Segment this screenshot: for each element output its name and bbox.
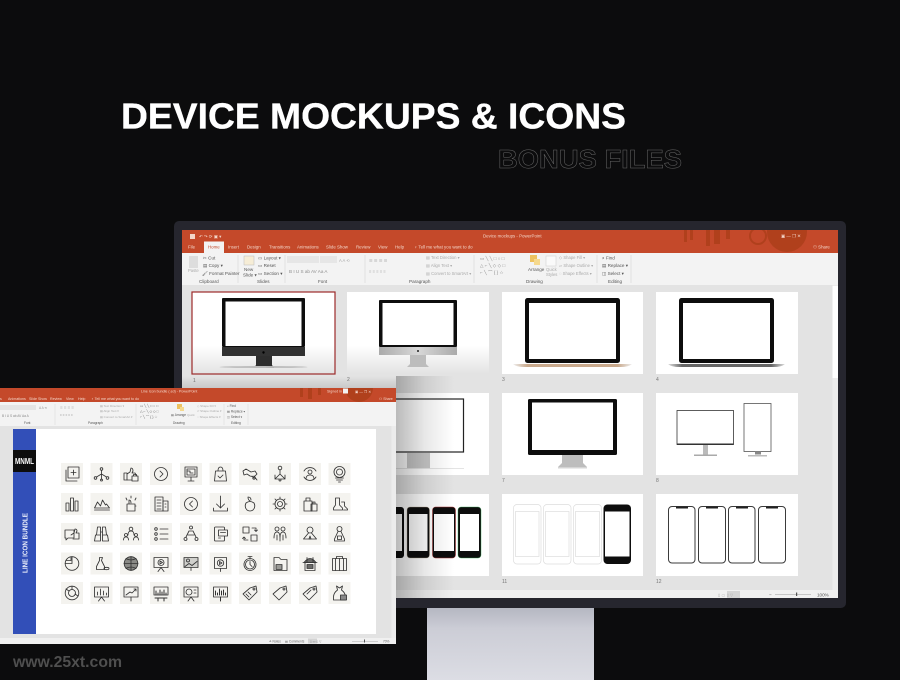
icon: image on board xyxy=(180,552,202,574)
icon: person with lock xyxy=(328,523,350,545)
front PowerPoint window xyxy=(0,374,396,644)
window title bar: Signed in xyxy=(327,390,342,394)
slide thumbnail 1: dark desktop xyxy=(192,292,335,384)
slide thumbnail 8: landscape and portrait displays: 8 xyxy=(656,478,659,484)
slide thumbnail 10: coloured phones, partly hidden xyxy=(347,494,489,576)
icon: pie chart xyxy=(61,552,83,574)
PowerPoint screen background xyxy=(182,230,838,598)
window status bar: 70% xyxy=(383,640,390,644)
icon: branching person xyxy=(269,463,291,485)
scrollbar xyxy=(832,285,838,590)
ribbon: B I U S ab AV Aa A xyxy=(289,269,328,274)
window ribbon: Font xyxy=(24,421,30,425)
window title bar: ♀ Tell me what you want to do xyxy=(91,397,139,401)
ribbon: Slide ▾ xyxy=(243,272,257,278)
icon: bullet list xyxy=(150,523,172,545)
vertical label: LINE ICON BUNDLE xyxy=(22,513,30,573)
icon: folder xyxy=(269,552,291,574)
window title bar: Slide Show xyxy=(29,397,47,401)
subtitle: outlined bonus files: BONUS FILES xyxy=(498,144,682,174)
title bar: ⚇ Share xyxy=(813,244,830,250)
ribbon: Paste xyxy=(188,268,199,273)
window title bar: Help xyxy=(78,397,85,401)
window ribbon: B I U S ab AV Aa A xyxy=(2,414,30,418)
icon: network nodes xyxy=(90,463,112,485)
title bar: ▣ — ❐ ✕ xyxy=(781,234,801,238)
window ribbon: A A ⟲ xyxy=(39,406,47,410)
icon: gear with thumb xyxy=(269,493,291,515)
slide thumbnail 3: gold laptop xyxy=(502,292,643,383)
title: DEVICE MOCKUPS & ICONS xyxy=(121,96,626,136)
ribbon: ▤ Convert to SmartArt ▾ xyxy=(426,271,471,276)
ribbon: ◫ Select ▾ xyxy=(602,271,625,276)
title bar: Home xyxy=(208,244,220,250)
watermark: www.25xt.com xyxy=(12,654,122,671)
icon: shop xyxy=(299,552,321,574)
icon: bars on screen xyxy=(210,582,232,604)
window title bar: ⚇ Share xyxy=(379,397,393,401)
window ribbon: ▤ Text Direction ▾ xyxy=(100,404,125,408)
status bar: 100% xyxy=(817,592,829,598)
window ribbon: Quick xyxy=(187,413,195,417)
window title bar: View xyxy=(66,397,74,401)
icon: stopwatch xyxy=(239,552,261,574)
slide thumbnail 7: black display: 7 xyxy=(502,478,505,484)
icon: play on board xyxy=(150,552,172,574)
status bar: ▯ ▭ ▯ ▽ xyxy=(718,592,734,598)
window status bar xyxy=(0,638,396,644)
monitor with PowerPoint window xyxy=(174,212,846,608)
icon: bar chart xyxy=(61,493,83,515)
icon: shopping bag with check xyxy=(210,463,232,485)
ribbon xyxy=(182,253,838,285)
ribbon: ▤ Replace ▾ xyxy=(602,263,629,268)
window ribbon: Editing xyxy=(231,421,241,425)
slide thumbnail 2: silver desktop: 2 xyxy=(347,377,350,383)
window title bar: Animations xyxy=(8,397,26,401)
ribbon: Editing xyxy=(608,279,622,284)
icon: bars on board xyxy=(150,582,172,604)
slide thumbnail 1: dark desktop: 1 xyxy=(193,378,196,384)
window ribbon: ◌ Shape Effects ▾ xyxy=(197,415,221,419)
title bar: Insert xyxy=(228,244,240,250)
ribbon: Quick xyxy=(546,267,558,272)
shadow cast by the front window xyxy=(182,376,454,598)
ribbon: ▭ Layout ▾ xyxy=(258,256,282,260)
slide thumbnail 11: white and black phones xyxy=(502,494,643,585)
ribbon: ≡ ≡ ≡ ≡ ≡ xyxy=(369,269,386,274)
ribbon: ▭ Section ▾ xyxy=(258,271,283,276)
blue sidebar xyxy=(13,429,36,634)
ribbon: A A ⟲ xyxy=(339,258,350,263)
ribbon: ▤ Text Direction ▾ xyxy=(426,255,460,260)
window ribbon: Drawing xyxy=(173,421,185,425)
icon: binoculars xyxy=(90,523,112,545)
window ribbon: ▱ Shape Outline ▾ xyxy=(197,409,222,413)
slide thumbnail 7: black display xyxy=(502,393,643,484)
icon: doughnut chart xyxy=(61,582,83,604)
slide thumbnail 12: notch phones xyxy=(656,494,798,585)
ribbon: Arrange xyxy=(528,267,545,272)
icon: swapping squares xyxy=(239,523,261,545)
icon: download xyxy=(210,493,232,515)
icon: people in cycle xyxy=(299,463,321,485)
window title bar: Review xyxy=(50,397,62,401)
ribbon: ▱ Shape Outline ▾ xyxy=(559,263,593,268)
icon: presentation monitor xyxy=(180,463,202,485)
icon: boots xyxy=(328,493,350,515)
slide thumbnail 12: notch phones: 12 xyxy=(656,579,662,585)
status bar xyxy=(182,590,838,598)
window ribbon: △ ⌐ ╲ ◇ ◇ □ xyxy=(140,410,159,414)
title bar xyxy=(182,230,838,253)
ribbon: Font xyxy=(318,279,328,284)
icon: price tag 3 xyxy=(299,582,321,604)
ribbon: ◇ Shape Fill ▾ xyxy=(559,255,585,260)
icon: hand with rays xyxy=(120,493,142,515)
logo: MNML: MNML xyxy=(15,457,34,466)
icon: arrow left in circle xyxy=(180,493,202,515)
ribbon: Paragraph xyxy=(409,279,431,284)
white slide xyxy=(13,429,376,634)
icon: apple hand xyxy=(239,493,261,515)
slide thumbnail 4: space grey laptop: 4 xyxy=(656,377,659,383)
ribbon: Styles xyxy=(546,272,557,277)
title bar: Device mockups - PowerPoint xyxy=(483,234,542,238)
ribbon: ⌐ ╲ ⌒ { } ☆ xyxy=(480,269,504,276)
monitor bezel xyxy=(174,221,846,608)
slide thumbnail 8: landscape and portrait displays xyxy=(656,393,798,484)
slide thumbnail 6: slim display, partly hidden xyxy=(347,393,489,475)
ribbon: ◌ Shape Effects ▾ xyxy=(559,271,592,276)
icon: suitcase xyxy=(328,552,350,574)
window ribbon: ☰ ☰ ☰ ☰ xyxy=(60,406,74,410)
window background xyxy=(0,388,396,644)
ribbon: 🖌 Format Painter xyxy=(202,270,240,276)
ribbon: New xyxy=(244,267,254,272)
icon: arrow right in circle xyxy=(150,463,172,485)
icon: chart on easel xyxy=(90,582,112,604)
title bar: ♀ Tell me what you want to do xyxy=(414,244,473,250)
window ribbon: ⌕ Find xyxy=(227,404,236,408)
icon: thumbs up speech bubble xyxy=(61,523,83,545)
ribbon: ▭ Reset xyxy=(258,263,276,268)
ribbon: △ ⌐ ╲ ◇ ◇ □ xyxy=(480,262,505,269)
window ribbon: ◇ Shape Fill ▾ xyxy=(197,404,216,408)
monitor stand xyxy=(427,607,594,680)
window ribbon: Paragraph xyxy=(88,421,103,425)
window ribbon: ▤ Arrange xyxy=(171,413,186,417)
ribbon: ▤ Align Text ▾ xyxy=(426,263,452,268)
icon: money bag and coins xyxy=(90,552,112,574)
title bar: Design xyxy=(247,244,261,250)
ribbon: ⌕ Find xyxy=(602,256,615,260)
window title bar: ▣ — ❐ ✕ xyxy=(355,389,371,394)
icon: handshake xyxy=(239,463,261,485)
window title bar: s xyxy=(0,397,2,401)
window status bar: ▤ Comments xyxy=(285,640,305,644)
slide thumbnail 2: silver desktop xyxy=(347,292,489,383)
icon: hierarchy triangle xyxy=(180,523,202,545)
icon: phone with chat xyxy=(210,523,232,545)
window ribbon: ◫ Select ▾ xyxy=(227,415,243,419)
window ribbon: ≡ ≡ ≡ ≡ ≡ xyxy=(60,413,73,417)
status bar: − xyxy=(769,592,772,598)
ribbon: ✂ Cut xyxy=(203,256,216,260)
icon: play on screen xyxy=(210,552,232,574)
ribbon: Slides xyxy=(257,279,270,284)
ribbon: Drawing xyxy=(526,279,543,284)
window ribbon: ▭ ╲ ╲ □ ○ □ xyxy=(140,404,158,408)
window title bar xyxy=(0,388,396,402)
icon: person xyxy=(299,523,321,545)
ribbon: ▭ ╲ ╲ □ ○ □ xyxy=(480,255,505,262)
icon: bags xyxy=(299,493,321,515)
icon: bulb badge xyxy=(328,463,350,485)
window scrollbar xyxy=(392,426,396,638)
logo: MNML xyxy=(13,450,36,472)
icon: money bag with coins xyxy=(328,582,350,604)
title bar: File xyxy=(188,244,196,250)
icon: growth on easel xyxy=(120,582,142,604)
window ribbon: ⌐ ╲ ⌒ { } ☆ xyxy=(140,414,157,419)
ribbon: Clipboard xyxy=(199,279,219,284)
title bar: Animations xyxy=(297,244,320,250)
title bar: Help xyxy=(395,244,405,250)
slide thumbnail 11: white and black phones: 11 xyxy=(502,579,507,585)
icon: two people xyxy=(269,523,291,545)
window title bar: Line Icon bundle (.ed) - PowerPoint xyxy=(141,390,197,394)
window ribbon xyxy=(0,402,396,426)
title bar: ↶ ↷ ⟳ ▣ ▾ xyxy=(199,234,221,239)
icon: thumbs up with lock xyxy=(120,463,142,485)
window ribbon: ▤ Align Text ▾ xyxy=(100,409,119,413)
icon: group of people xyxy=(90,493,112,515)
window ribbon: ▤ Convert to SmartArt ▾ xyxy=(100,415,133,419)
icon: team hierarchy xyxy=(120,523,142,545)
title bar: View xyxy=(378,244,388,250)
window ribbon: ▤ Replace ▾ xyxy=(227,410,245,414)
slide thumbnail 4: space grey laptop xyxy=(656,292,798,383)
ribbon: ☰ ☰ ☰ ☰ xyxy=(369,258,388,263)
icon: pie on easel xyxy=(180,582,202,604)
icon: shaded globe xyxy=(120,552,142,574)
window status bar: ▯ ▭ ▯ ▽ xyxy=(310,640,322,644)
ribbon: ▤ Copy ▾ xyxy=(203,263,224,268)
window status bar: ≜ Notes xyxy=(269,640,281,644)
slide thumbnail 3: gold laptop: 3 xyxy=(502,377,505,383)
icon: price tag 2 xyxy=(269,582,291,604)
icon: price tag 1 xyxy=(239,582,261,604)
icon: add layers xyxy=(61,463,83,485)
title bar: Review xyxy=(356,244,371,250)
title bar: Slide Show xyxy=(326,244,349,250)
icon grid xyxy=(61,463,350,604)
icon: office building xyxy=(150,493,172,515)
title bar: Transitions xyxy=(269,244,291,250)
